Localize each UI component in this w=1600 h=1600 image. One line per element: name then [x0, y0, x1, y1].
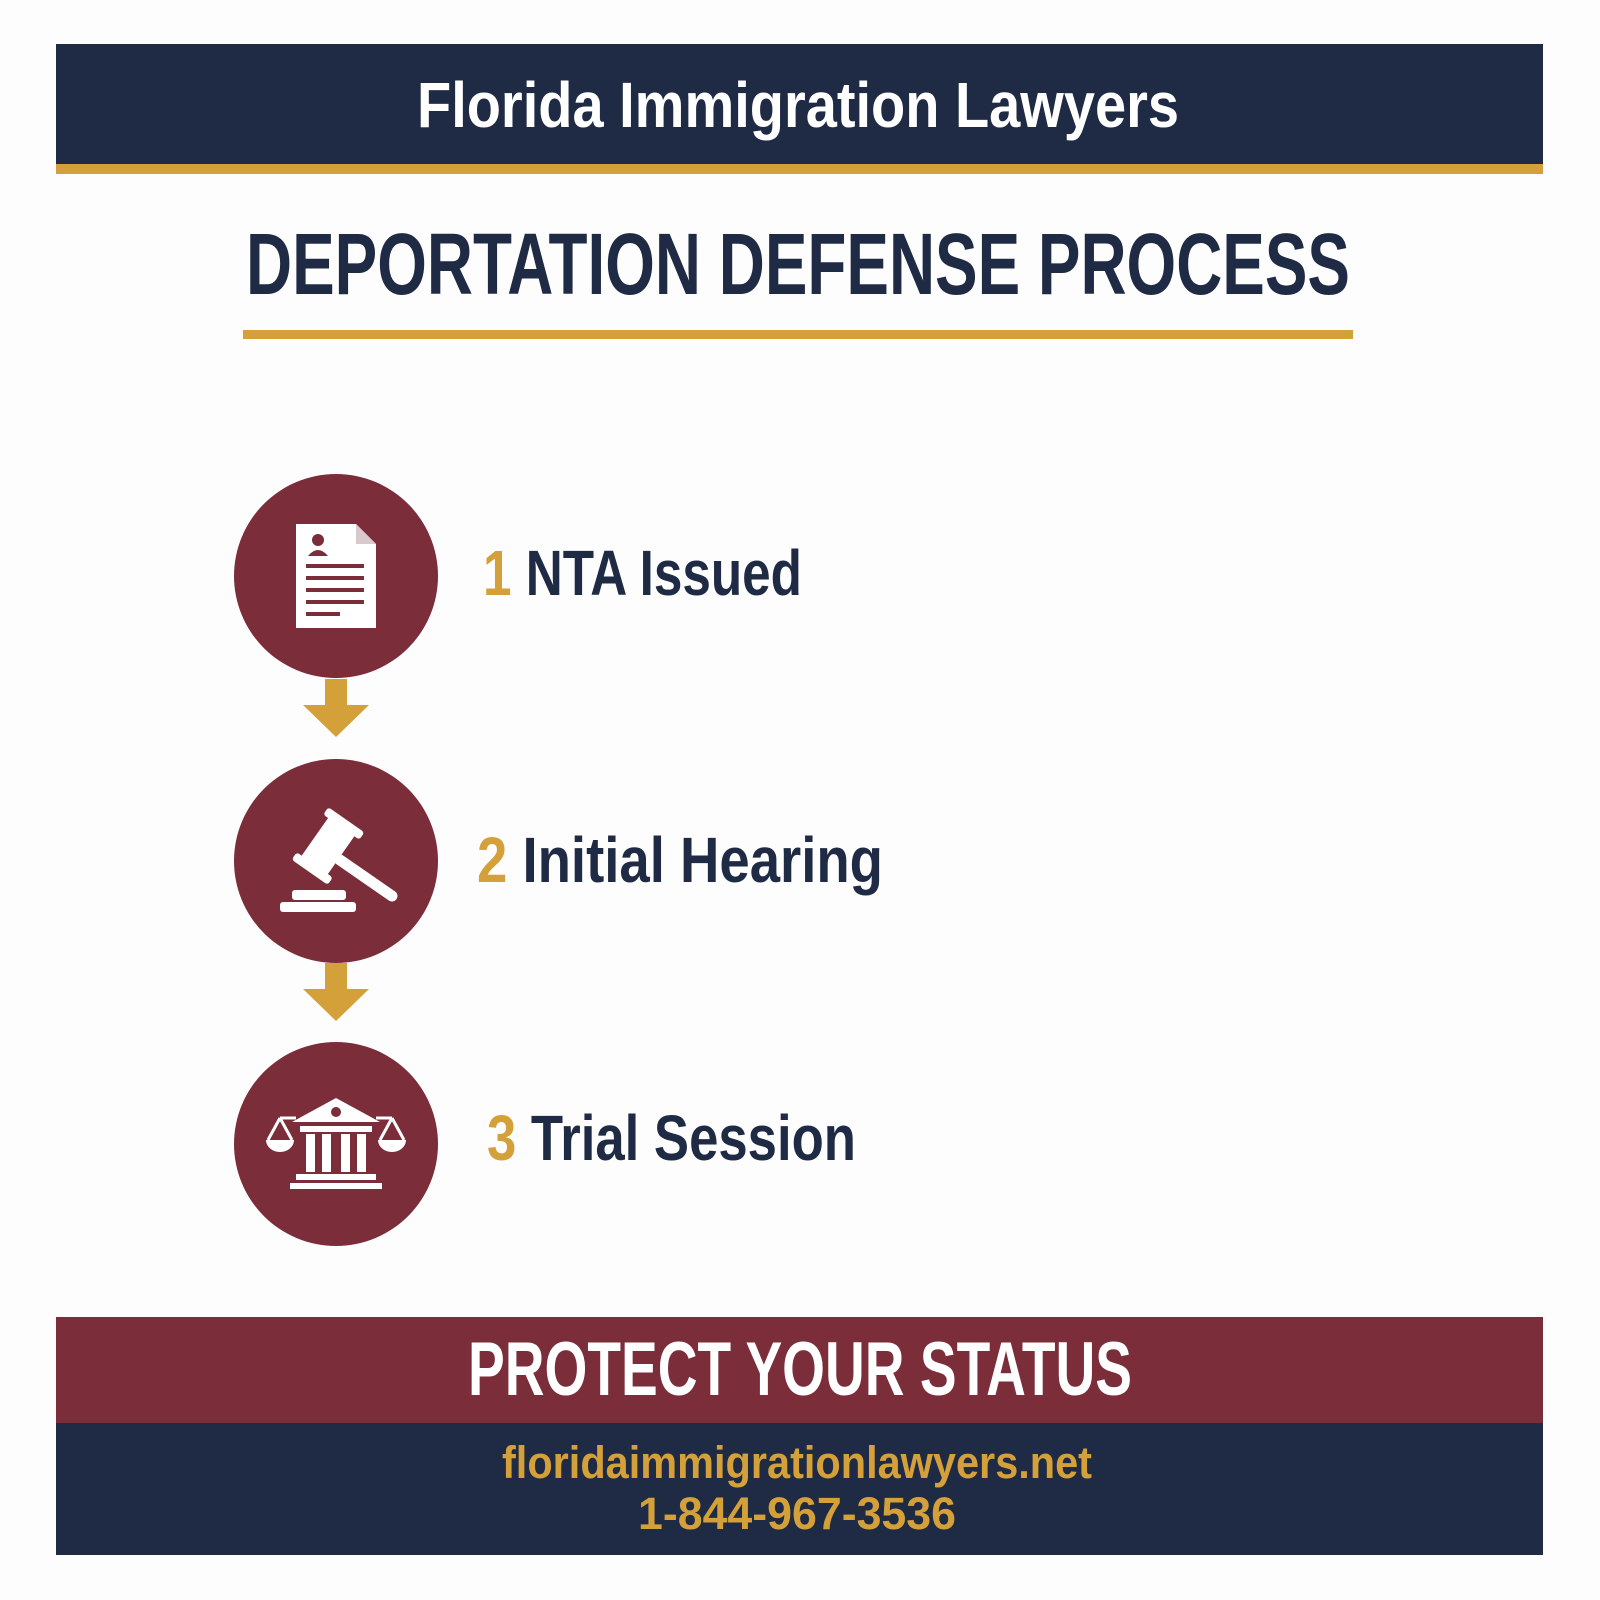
icon: gavel [234, 759, 438, 963]
arrow 1 [303, 679, 369, 737]
header band [56, 44, 1543, 174]
icon: courthouse with scales [234, 1042, 438, 1246]
footer contact: 1-844-967-3536 [638, 1488, 956, 1539]
step label 3: 3 Trial Session [487, 1102, 856, 1174]
step label 1: 1 NTA Issued [483, 537, 802, 609]
footer contact [56, 1423, 1543, 1555]
icon: document [234, 474, 438, 678]
title [243, 216, 1353, 339]
arrow 2 [303, 963, 369, 1021]
footer banner: PROTECT YOUR STATUS [468, 1327, 1132, 1412]
header band: Florida Immigration Lawyers [417, 69, 1179, 141]
step 1 [234, 474, 802, 678]
footer contact: floridaimmigrationlawyers.net [502, 1437, 1092, 1488]
step 3 [234, 1042, 856, 1246]
step label 2: 2 Initial Hearing [477, 824, 883, 896]
footer banner [56, 1317, 1543, 1424]
step 2 [234, 759, 883, 963]
